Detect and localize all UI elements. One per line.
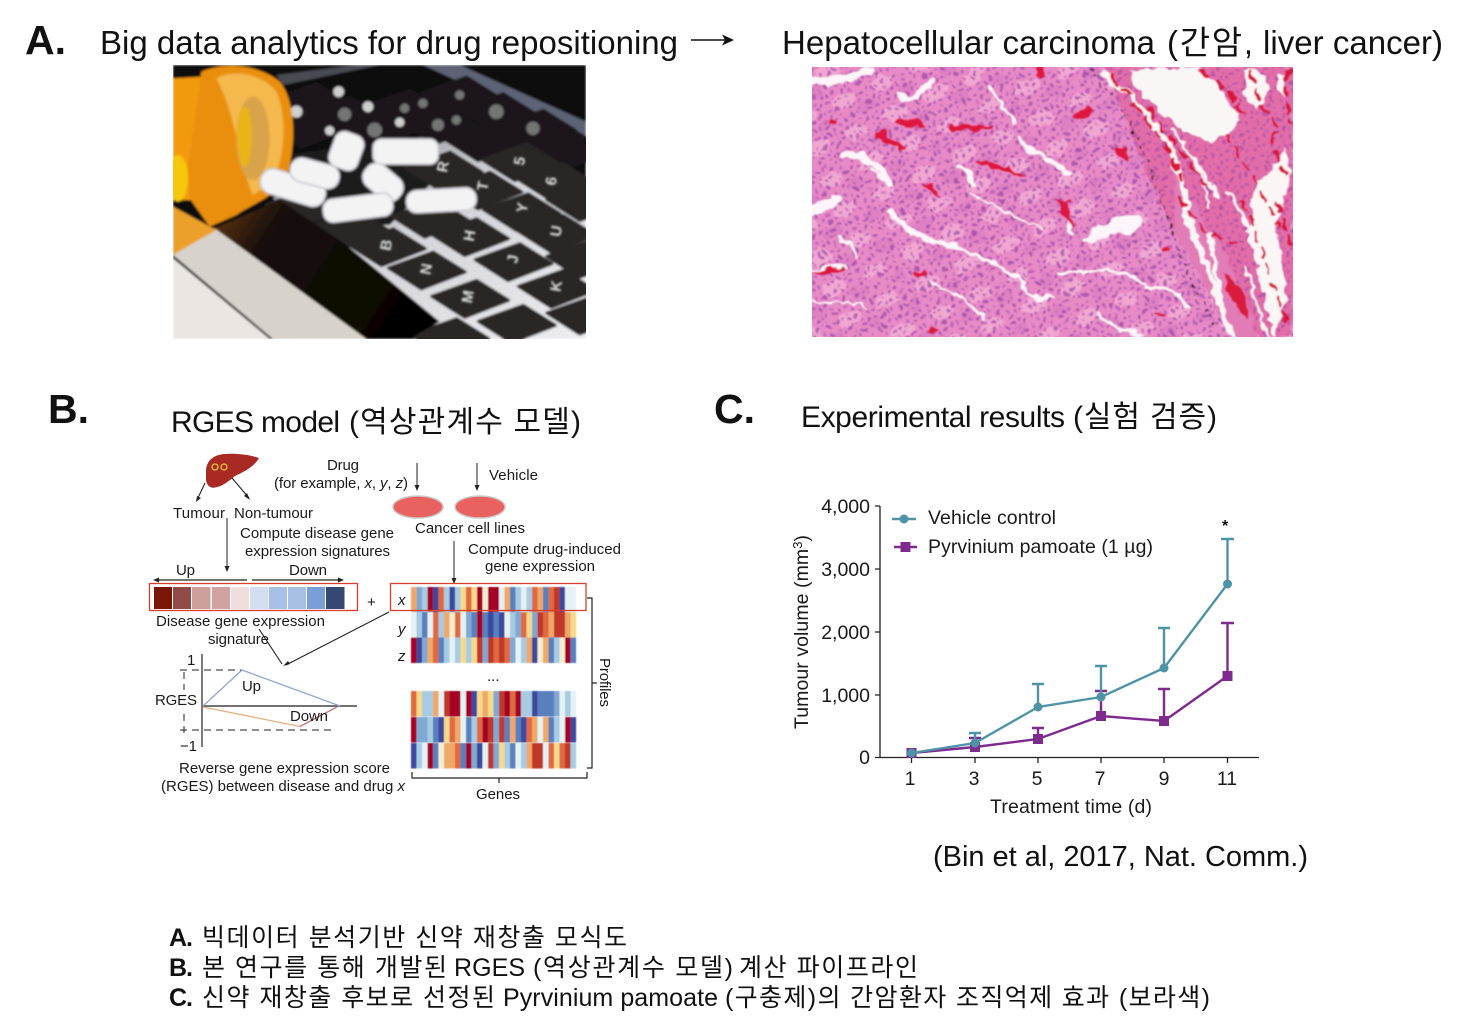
arrows: up and down ranges xyxy=(153,578,344,582)
heading: big data analytics: Big data analytics for drug repositioning xyxy=(100,24,678,61)
heatmap: top profiles xyxy=(390,584,586,663)
bracket: genes xyxy=(412,772,587,803)
x axis labels: 1 xyxy=(905,768,915,790)
panel B: RGES model xyxy=(48,386,621,803)
x axis labels: 11 xyxy=(1217,768,1237,790)
y axis labels: 4,000 xyxy=(821,496,870,518)
label: A.: A. xyxy=(25,17,66,63)
caption line C: Pyrvinium pamoate xyxy=(503,984,718,1012)
arrow: compute to heatmap xyxy=(452,541,456,584)
heatmap: bottom profiles xyxy=(411,691,576,768)
significance star: * xyxy=(1222,518,1229,535)
y axis labels: 1,000 xyxy=(821,685,870,707)
key letters: U xyxy=(547,224,566,238)
arrows: to RGES plot xyxy=(259,612,389,666)
caption line A: A. xyxy=(169,924,193,952)
text: disease gene expression signature xyxy=(156,613,325,648)
key letters: B xyxy=(377,238,396,252)
heading: experimental results: Experimental results xyxy=(801,401,1065,434)
key letters: R xyxy=(434,160,453,174)
text: disease gene expression signature: signature xyxy=(208,631,269,648)
key letters: 6 xyxy=(543,175,561,187)
y axis labels xyxy=(821,496,870,769)
RGES plot: Down xyxy=(290,708,328,725)
y axis title: 3 xyxy=(790,542,805,549)
caption line C: (구충제)의 간암환자 조직억제 효과 (보라색) xyxy=(725,984,1210,1012)
photo: liver tissue histology xyxy=(812,67,1293,337)
text: drug: Drug xyxy=(327,457,359,474)
caption line C: 신약 재창출 후보로 선정된 xyxy=(202,984,495,1012)
line chart: tumour volume xyxy=(790,496,1259,818)
key letters: N xyxy=(417,262,436,276)
label: B.: B. xyxy=(48,386,89,432)
label: C.: C. xyxy=(714,386,755,432)
text: vehicle: Vehicle xyxy=(489,467,538,484)
heading: hepatocellular carcinoma: (간암, xyxy=(1167,24,1253,61)
x axis labels: 5 xyxy=(1032,768,1043,790)
y axis title: Tumour volume (mm xyxy=(791,549,813,729)
text: compute drug-induced: gene expression xyxy=(485,558,595,575)
series: vehicle control xyxy=(907,539,1234,758)
caption line B: B. xyxy=(169,954,193,982)
panel A heading xyxy=(25,17,1443,63)
heading: experimental results: (실험 검증) xyxy=(1073,401,1217,434)
bracket: profiles xyxy=(587,598,613,768)
row labels: ... xyxy=(487,668,500,685)
key letters: H xyxy=(461,229,479,243)
text: RGES definition xyxy=(161,760,406,795)
arrows: liver to samples xyxy=(196,478,250,502)
heading: RGES model xyxy=(171,406,581,439)
heading: RGES model: (역상관계수 모델) xyxy=(349,406,581,439)
icon: liver xyxy=(206,454,259,488)
x axis labels xyxy=(905,768,1237,790)
caption line B: 본 연구를 통해 개발된 xyxy=(202,954,447,982)
arrow: to hepatocellular carcinoma xyxy=(691,34,734,46)
y axis labels: 2,000 xyxy=(821,622,870,644)
text: sample labels: Up xyxy=(176,562,195,579)
text: sample labels: Down xyxy=(289,562,327,579)
arrow: vehicle xyxy=(474,463,480,491)
y axis title: ) xyxy=(791,535,813,542)
legend: Pyrvinium pamoate (1 µg) xyxy=(928,536,1153,558)
series: pyrvinium pamoate xyxy=(906,623,1234,758)
caption line B: (역상관계수 모델) xyxy=(533,954,733,982)
row labels: z xyxy=(397,648,406,665)
RGES plot: 1 xyxy=(187,652,195,669)
text: disease gene expression signature: Disease gene expression xyxy=(156,613,325,630)
y axis labels: 0 xyxy=(859,747,870,769)
bracket: profiles: Profiles xyxy=(596,658,613,707)
RGES plot: −1 xyxy=(180,738,197,755)
row labels: y xyxy=(397,621,407,638)
x axis title: Treatment time (d) xyxy=(990,796,1152,818)
heading: hepatocellular carcinoma: Hepatocellular carcinoma xyxy=(782,24,1156,61)
key letters: J xyxy=(504,253,523,265)
key letters: T xyxy=(474,179,493,192)
caption line B: 계산 파이프라인 xyxy=(739,954,918,982)
heading: RGES model: RGES model xyxy=(171,406,340,439)
caption text block xyxy=(169,924,1210,1012)
RGES plot xyxy=(155,652,357,755)
y axis labels: 3,000 xyxy=(821,559,870,581)
bracket: genes: Genes xyxy=(476,786,520,803)
caption line B xyxy=(169,954,918,982)
text: sample labels xyxy=(173,505,394,579)
RGES plot: RGES xyxy=(155,692,197,709)
photo: pills on laptop keyboard xyxy=(173,65,586,339)
arrow: tumour to signature xyxy=(224,518,230,572)
signature strip xyxy=(150,584,358,610)
key letters xyxy=(377,155,566,305)
text: sample labels: Non-tumour xyxy=(234,505,313,522)
plus sign: + xyxy=(367,594,376,611)
axes xyxy=(875,506,1259,763)
heading: hepatocellular carcinoma: liver cancer) xyxy=(1263,24,1443,61)
text: drug: (for example, x, y, z) xyxy=(274,475,408,492)
legend: Vehicle control xyxy=(928,507,1056,529)
caption line A: 빅데이터 분석기반 신약 재창출 모식도 xyxy=(202,924,627,952)
panel C: experimental results xyxy=(714,386,1308,873)
text: compute drug-induced: Compute drug-induced xyxy=(468,541,621,558)
x axis labels: 7 xyxy=(1095,768,1105,790)
citation: (Bin et al, 2017, Nat. Comm.) xyxy=(933,841,1308,873)
text: sample labels: Tumour xyxy=(173,505,225,522)
key letters: K xyxy=(547,279,566,293)
arrow: drug xyxy=(414,463,420,491)
row labels: x xyxy=(397,592,406,609)
caption line C xyxy=(169,984,1210,1012)
text: cancer cell lines: Cancer cell lines xyxy=(415,520,525,537)
heading: experimental results xyxy=(801,401,1217,434)
icon: petri dishes xyxy=(393,496,505,518)
key letters: Y xyxy=(514,201,532,214)
x axis labels: 3 xyxy=(969,768,979,790)
text: sample labels: Compute disease gene xyxy=(240,525,394,542)
legend xyxy=(892,507,1153,558)
key letters: M xyxy=(459,289,478,305)
RGES plot: Up xyxy=(242,678,261,695)
text: RGES definition: Reverse gene expression score xyxy=(179,760,390,777)
key letters: 5 xyxy=(511,155,529,167)
text: RGES definition: (RGES) between disease and drug x xyxy=(161,778,406,795)
text: compute drug-induced xyxy=(468,541,621,575)
heading: hepatocellular carcinoma xyxy=(782,24,1443,61)
caption line C: C. xyxy=(169,984,193,1012)
text: sample labels: expression signatures xyxy=(245,543,390,560)
row labels xyxy=(397,592,500,685)
text: drug xyxy=(274,457,408,492)
x axis labels: 9 xyxy=(1159,768,1169,790)
caption line B: RGES xyxy=(454,954,525,982)
